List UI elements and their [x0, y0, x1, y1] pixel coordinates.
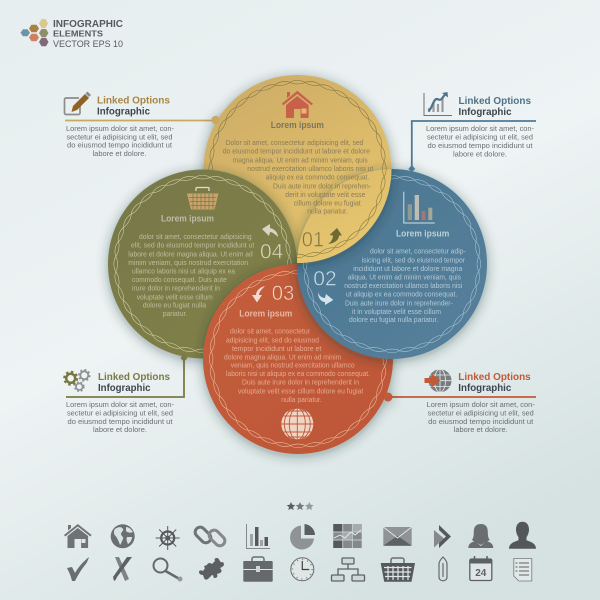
text block: nostrud exercitation ullamco laboris nisi ut [247, 166, 373, 173]
text block: do eiusmod tempo incididunt ut [68, 419, 173, 426]
panel: linked options bottom right [388, 369, 536, 434]
text block: magna aliqua. Ut enim ad minim veniam, quis [233, 157, 368, 164]
red disc [203, 264, 393, 454]
text block: labore et dolore. [93, 427, 147, 434]
text block: Dolor sit amet, consectetur adipisicing elit, sed [226, 140, 363, 147]
panel: linked options top right [412, 92, 536, 168]
subheading: Infographic [458, 107, 512, 118]
connector line [66, 358, 184, 397]
icon: table chart [333, 524, 362, 548]
panel: linked options top left [64, 92, 220, 158]
circle 03: red [203, 264, 393, 454]
subheading: Infographic [98, 383, 151, 394]
heading: Lorem ipsum [161, 214, 214, 225]
text block: Duis aute irure dolor in reprehen- [273, 183, 371, 190]
icon: arrow [318, 292, 333, 305]
icon: house [64, 524, 92, 548]
circle 02: blue [297, 165, 487, 359]
text block: do eiusmod tempo incididunt ut [67, 143, 172, 150]
text block: sectetur ei adipisicing ut elit, sed [427, 134, 533, 141]
text block [223, 140, 373, 216]
text block: voluptate velit esse cillum [137, 294, 213, 301]
number 02: 02 [313, 268, 337, 291]
icon: basket [381, 558, 415, 582]
text block: dolore magna aliqua. Ut enim ad minim [224, 355, 342, 362]
text block: it in voluptate velit esse cillum [352, 309, 441, 316]
text block: sectetur ei adipisicing ut elit, sed [67, 410, 173, 418]
logo text [53, 18, 123, 50]
circle 01 overlap: yellow over blue [297, 169, 398, 272]
icon: puzzle piece [199, 558, 224, 580]
text block: Lorem ipsum dolor sit amet, con- [66, 126, 174, 133]
text block: minim veniam, quis nostrud exercitation [128, 260, 248, 267]
icon: globe with arrow [424, 369, 452, 392]
text block: isicing elit, sed do eiusmod tempor [362, 257, 466, 264]
logo hexagons [20, 19, 48, 46]
blue disc [297, 165, 487, 359]
logo text: ELEMENTS [53, 28, 103, 38]
text block: Duis aute irure dolor in reprehenderit in [242, 380, 359, 387]
connector line [65, 116, 220, 124]
heading: Linked Options [98, 372, 170, 383]
text block: derit in voluptate velit esse [285, 192, 365, 199]
icon: basket [187, 188, 218, 210]
text block [224, 329, 370, 404]
text block [128, 234, 254, 318]
icon: bar chart [404, 192, 435, 223]
heading: Linked Options [458, 96, 531, 107]
icon: cross mark [113, 557, 132, 581]
icon: arrow [262, 224, 278, 237]
text block: dolor sit amet, consectetur [230, 329, 311, 336]
text block: pariatur. [163, 311, 187, 318]
icon: growth chart [424, 92, 452, 116]
icon: org chart [332, 558, 364, 581]
text block [66, 402, 174, 434]
number 04: 04 [260, 240, 284, 263]
icon: pie chart [290, 524, 315, 549]
olive disc [108, 170, 297, 362]
text block: dolore eu fugiat nulla pariatur. [349, 317, 438, 324]
icon: magnifier [154, 558, 182, 582]
number 03: 03 [272, 282, 294, 305]
circle 01 content [223, 91, 373, 252]
icon: gears [64, 370, 90, 391]
icon: clock [291, 558, 314, 581]
icon: check mark [67, 557, 89, 581]
heading: Linked Options [458, 372, 531, 383]
text block [427, 402, 535, 434]
text block: ut aliquip ex ea commodo consequat. [346, 292, 457, 299]
icon: ship wheel [156, 526, 180, 550]
text block: do eiusmod tempor incididunt ut labore et dolore [223, 149, 370, 156]
text block: Duis aute irure dolor in reprehender- [345, 300, 453, 307]
heading: Linked Options [97, 96, 170, 106]
icon row 1 [64, 522, 536, 550]
icon: woman [468, 524, 493, 548]
text block: Lorem ipsum dolor sit amet, con- [426, 126, 534, 133]
text block: voluptate velit esse cillum dolore eu fugiat [238, 388, 363, 395]
text block: labore et dolore. [453, 152, 507, 158]
icon: envelope [383, 527, 412, 546]
text block [344, 249, 466, 324]
text block: commodo consequat. Duis aute [132, 277, 227, 284]
icon: note [514, 558, 532, 581]
text block: sectetur ei adipisicing ut elit, sed [428, 410, 534, 418]
icon: globe [281, 408, 313, 440]
icon row 2 [67, 556, 532, 582]
text block: aliquip ex ea commodo consequat. [266, 175, 369, 182]
logo [20, 18, 123, 50]
text block: labore et dolore. [454, 427, 508, 434]
logo text: INFOGRAPHIC [53, 18, 123, 30]
subheading: Infographic [458, 383, 512, 394]
subheading: Infographic [97, 106, 150, 118]
text block: adipisicing elit, sed do eiusmod [226, 337, 319, 344]
text block: sectetur ei adipisicing ut elit, sed [66, 134, 173, 141]
text block: do eiusmod tempo incididunt ut [428, 143, 533, 150]
circle 04: olive [108, 170, 297, 362]
text block [426, 126, 534, 158]
text block: dolore eu fugiat nulla [143, 303, 206, 310]
text block: aliqua. Ut enim ad minim veniam, quis [348, 275, 462, 282]
stars rating [287, 502, 314, 510]
icon: calendar [470, 556, 492, 580]
text block: dolor sit amet, consectetur adipisicing [139, 234, 252, 241]
panel: linked options bottom left [64, 358, 184, 434]
text block: cillum dolore eu fugiat [294, 200, 361, 207]
icon: bar chart [246, 524, 270, 548]
text block: laboris nisi ut aliquip ex ea commodo consequat. [226, 371, 370, 378]
icon: briefcase [243, 557, 273, 582]
icon: arrow [252, 286, 265, 302]
icon: man [509, 522, 536, 549]
text block: dolor sit amet, consectetur adip- [370, 249, 466, 256]
icon: arrow [328, 228, 342, 244]
heading: Lorem ipsum [239, 309, 292, 320]
text block: irure dolor in reprehenderit in [132, 286, 220, 293]
logo text: VECTOR EPS 10 [53, 39, 123, 50]
text block: Lorem ipsum dolor sit amet, con- [427, 402, 535, 409]
circle 01 base: yellow disc [204, 75, 392, 263]
text block: Lorem ipsum dolor sit amet, con- [66, 402, 174, 409]
text block: veniam, quis nostrud exercitation ullamco [231, 363, 355, 370]
text block: labore et dolore magna aliqua. Ut enim ad [128, 251, 253, 258]
number 01: 01 [302, 229, 324, 252]
heading: Lorem ipsum [396, 228, 449, 239]
icon: chevrons [434, 525, 451, 548]
heading: Lorem ipsum [271, 120, 324, 131]
text block: elit, sed do eiusmod tempor incididunt ut [131, 243, 254, 250]
icon: globe [111, 524, 135, 548]
text block: do eiusmod tempo incididunt ut [428, 419, 533, 426]
text block: incididunt ut labore et dolore magna [353, 266, 462, 273]
text block: ullamco laboris nisi ut aliquip ex ea [132, 269, 235, 276]
text block: nostrud exercitation ullamco laboris nisi [344, 283, 463, 290]
text block: nulla pariatur. [307, 209, 348, 216]
icon: calendar: 24 [475, 568, 487, 579]
text block: nulla pariatur. [281, 397, 322, 404]
text block: tempor incididunt ut labore et [232, 346, 321, 353]
icon: chain link [193, 525, 227, 548]
icon: pencil and box [64, 92, 91, 114]
text block [66, 126, 174, 158]
icon: paper clip [439, 557, 447, 581]
connector line [412, 121, 536, 168]
text block: labore et dolore. [92, 151, 147, 158]
connector line [388, 396, 536, 398]
icon: house [282, 91, 313, 118]
